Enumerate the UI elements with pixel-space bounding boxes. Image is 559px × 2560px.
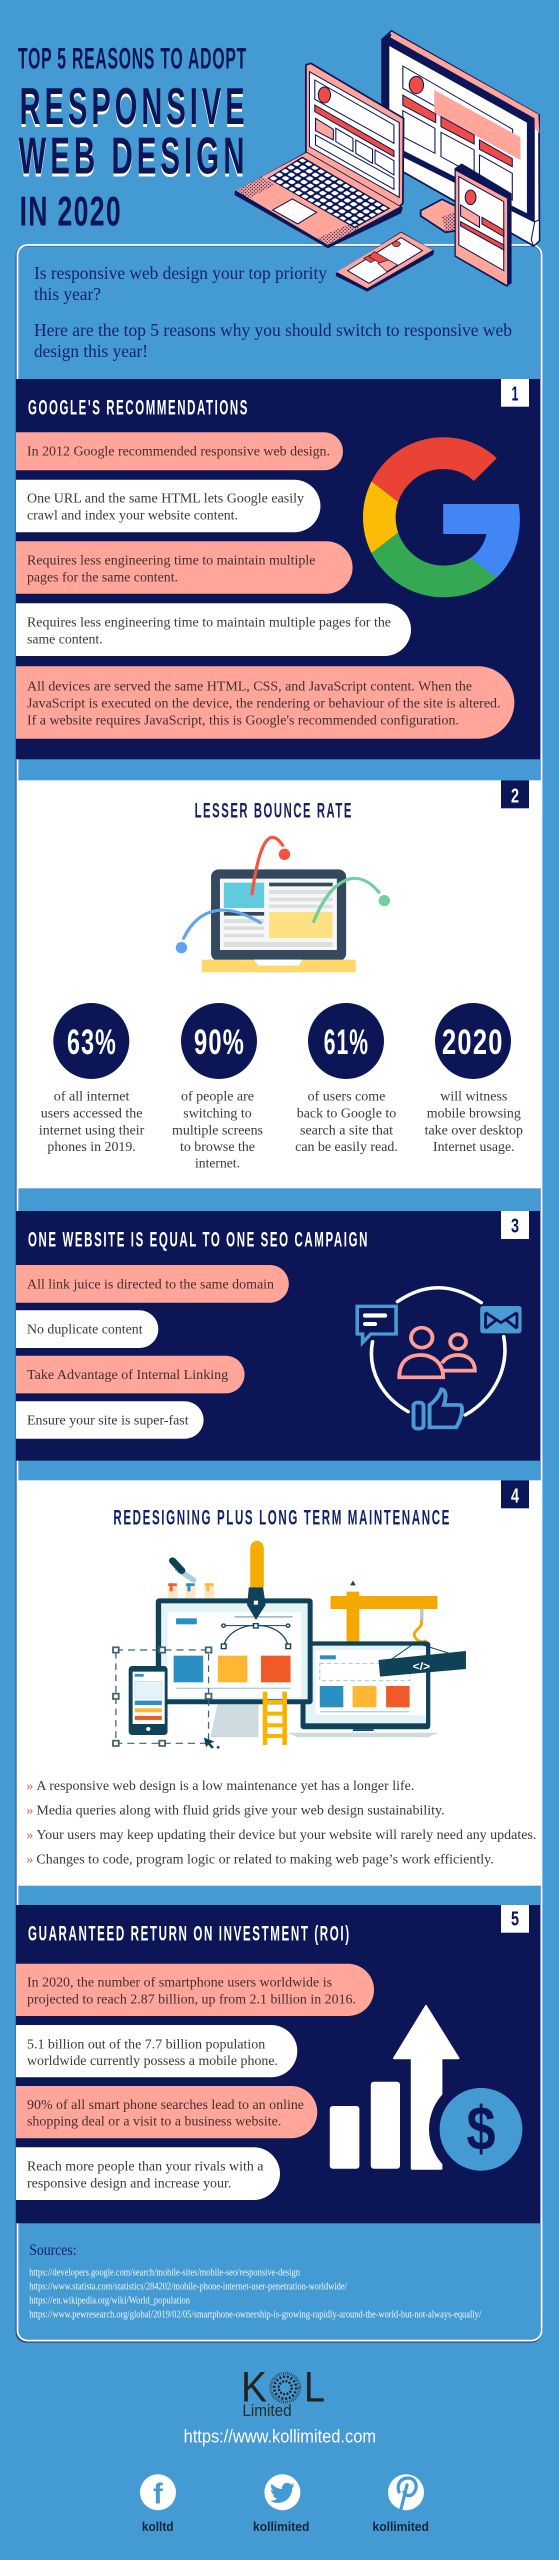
icon: code sign: </> (413, 1660, 430, 1673)
bullet 3: » (26, 1828, 33, 1843)
icon: chat bubble (357, 1306, 396, 1343)
stat 61%: back to Google to (297, 1107, 396, 1122)
bullet 1: A responsive web design is a low maintenance yet has a longer life. (36, 1779, 414, 1794)
bullet 2: Media queries along with fluid grids give your web design sustainability. (36, 1804, 445, 1819)
logo: kol limited: L (304, 2364, 325, 2412)
icon: phone (129, 1666, 168, 1735)
pill 3: Requires less engineering time to maintain multiple (27, 553, 316, 568)
intro text: design this year! (34, 341, 148, 361)
green bounce (314, 878, 390, 922)
pill 2: No duplicate content (27, 1323, 143, 1338)
number badge 2 (501, 780, 529, 808)
social: facebook (140, 2474, 176, 2534)
website url: https://www.kollimited.com (184, 2427, 376, 2447)
heading: LESSER BOUNCE RATE (195, 799, 353, 822)
pill 5: If a website requires JavaScript, this is Google's recommended configuration. (27, 713, 459, 728)
pill 4: Ensure your site is super-fast (27, 1414, 189, 1429)
sources: https://www.statista.com/statistics/284202/mobile-phone-internet-user-penetration-worldwide/ (29, 2281, 347, 2292)
pill 4: Requires less engineering time to maintain multiple pages for the (27, 616, 391, 631)
pill 2: crawl and index your website content. (27, 508, 238, 523)
icon: envelope (480, 1306, 522, 1333)
pill 5: JavaScript is executed on the device, the rendering or behaviour of the site is altered. (27, 696, 500, 711)
title line: web design: WEB DESIGN (18, 127, 248, 185)
icon: google g (363, 437, 520, 597)
stat 90% (172, 1003, 263, 1172)
sources: Sources: (29, 2242, 77, 2259)
title line: web design shadow: WEB DESIGN (18, 130, 248, 188)
pill 1: In 2020, the number of smartphone users worldwide is (27, 1976, 332, 1991)
social: twitter: kollimited (253, 2519, 309, 2534)
logo: kol limited: K (241, 2364, 267, 2412)
stat 2020 (425, 1003, 523, 1155)
stat 2020: take over desktop (425, 1123, 523, 1138)
stat 90%: multiple screens (172, 1123, 263, 1138)
social: pinterest: kollimited (372, 2519, 429, 2534)
icon: desktop monitor (382, 31, 539, 246)
number badge 3 (501, 1211, 529, 1239)
pill 4 (16, 603, 411, 656)
icon: fountain pen (247, 1541, 266, 1620)
red bounce (252, 837, 290, 894)
sources: https://www.pewresearch.org/global/2019/02/05/smartphone-ownership-is-growing-rapidly-around-the-world-but-not-always-equally/ (29, 2309, 481, 2320)
stat 61%: of users come (308, 1090, 385, 1105)
sources: https://en.wikipedia.org/wiki/World_population (29, 2295, 190, 2306)
number badge 1: 1 (512, 384, 518, 406)
pill 3: 90% of all smart phone searches lead to an online (27, 2098, 304, 2113)
social: pinterest (372, 2474, 429, 2534)
stat 63%: 63% (67, 1023, 117, 1062)
panel: redesigning plus long term maintenance (18, 1480, 542, 1886)
icon: code sign (379, 1643, 466, 1677)
pill 3: pages for the same content. (27, 570, 178, 585)
pill 2: 5.1 billion out of the 7.7 billion population (27, 2037, 265, 2052)
number badge 3: 3 (511, 1215, 519, 1237)
number badge 4: 4 (511, 1485, 520, 1507)
illustration: responsive design workshop (113, 1541, 466, 1749)
heading: GOOGLE'S RECOMMENDATIONS (28, 396, 249, 419)
stat 63% (39, 1003, 145, 1155)
title (18, 42, 249, 235)
bullet 3: Your users may keep updating their device but your website will rarely need any updates. (36, 1828, 536, 1843)
icon: laptop (235, 63, 404, 248)
icon: selection frame (113, 1647, 220, 1749)
sources: https://developers.google.com/search/mobile-sites/mobile-seo/responsive-design (29, 2267, 300, 2278)
pill 1: All link juice is directed to the same domain (27, 1277, 274, 1292)
number badge 5 (501, 1905, 529, 1933)
pill 4: Reach more people than your rivals with a (27, 2160, 264, 2175)
stat 61% (295, 1003, 398, 1155)
blue bounce (176, 910, 260, 953)
pill 1 (16, 1265, 289, 1303)
pill 3 (16, 1356, 245, 1393)
icon: growth chart with dollar coin (330, 2006, 533, 2181)
stat 90%: to browse the (180, 1140, 255, 1155)
stat 2020: 2020 (442, 1023, 504, 1062)
panel: lesser bounce rate (18, 780, 542, 1188)
logo: kol limited (241, 2364, 325, 2420)
panel: google's recommendations (16, 379, 540, 759)
number badge 4 (501, 1480, 529, 1508)
title line: in 2020: IN 2020 (20, 188, 122, 235)
stat 61%: 61% (324, 1023, 369, 1062)
pill 2 (16, 1310, 158, 1348)
illustration: laptop with bouncing balls (176, 837, 390, 972)
pill 1 (16, 432, 343, 470)
intro text: Is responsive web design your top priority (34, 263, 327, 283)
bullet 4: Changes to code, program logic or related to making web page’s work efficiently. (36, 1853, 494, 1868)
pill 4: same content. (27, 632, 103, 647)
social: facebook: f (153, 2478, 163, 2510)
stat 63%: users accessed the (41, 1107, 142, 1122)
stat 2020: mobile browsing (427, 1107, 521, 1122)
stat 2020: Internet usage. (433, 1140, 515, 1155)
card outline (16, 245, 541, 2342)
intro text: this year? (34, 284, 101, 304)
pill 4 (16, 1401, 204, 1439)
icon: tablet (455, 163, 512, 287)
icon: people (399, 1328, 475, 1377)
logo: kol limited: Limited (242, 2401, 292, 2420)
number badge 5: 5 (511, 1909, 519, 1931)
icon: monitor stand (421, 199, 463, 232)
bullet 1: » (26, 1779, 33, 1794)
title line: responsive shadow: RESPONSIVE (20, 81, 249, 139)
stat 61%: search a site that (300, 1123, 393, 1138)
stat 90%: of people are (181, 1090, 254, 1105)
pill 3 (16, 541, 353, 594)
stat 63%: internet using their (39, 1123, 145, 1138)
pill 2: worldwide currently possess a mobile phone. (27, 2054, 278, 2069)
title line: top 5 reasons: TOP 5 REASONS TO ADOPT (18, 42, 247, 75)
icon: smartphone (336, 232, 434, 292)
intro text: Here are the top 5 reasons why you should switch to responsive web (34, 320, 512, 340)
icon: laptop (287, 1641, 439, 1737)
stat 61%: can be easily read. (295, 1140, 398, 1155)
icon: ladder (263, 1692, 287, 1745)
stat 63%: phones in 2019. (47, 1140, 136, 1155)
pill 3: shopping deal or a visit to a business website. (27, 2115, 281, 2130)
pill 4 (16, 2147, 280, 2200)
pill 2 (16, 2025, 297, 2077)
icon: crane (330, 1581, 437, 1642)
intro text (34, 263, 512, 361)
bullet 2: » (26, 1804, 33, 1819)
number badge 1 (501, 379, 529, 407)
social: facebook: kolltd (142, 2519, 174, 2534)
stat 63%: of all internet (54, 1090, 130, 1105)
pill 1 (16, 1964, 374, 2016)
pill 5: All devices are served the same HTML, CSS, and JavaScript content. When the (27, 680, 472, 695)
stat 90%: 90% (194, 1023, 245, 1062)
sources (29, 2242, 481, 2320)
pill 1: projected to reach 2.87 billion, up from 2.1 billion in 2016. (27, 1992, 356, 2007)
pill 4: responsive design and increase your. (27, 2176, 231, 2191)
stat 90%: switching to (183, 1107, 252, 1122)
icon: colour swatches (168, 1583, 214, 1598)
stat 2020: will witness (440, 1090, 507, 1105)
bullet 4: » (26, 1853, 33, 1868)
pill 3 (16, 2086, 317, 2138)
number badge 2: 2 (511, 785, 519, 807)
title line: responsive: RESPONSIVE (20, 78, 249, 136)
pill 3: Take Advantage of Internal Linking (27, 1368, 228, 1383)
icon: desktop monitor (156, 1598, 313, 1704)
illustration: isometric responsive devices (235, 31, 539, 292)
panel: guaranteed return on investment (16, 1905, 540, 2223)
pill 2: One URL and the same HTML lets Google easily (27, 492, 304, 507)
bullet list (26, 1779, 536, 1868)
icon: monitor stand (210, 1704, 258, 1737)
stat 90%: internet. (195, 1157, 240, 1172)
panel: one website one seo campaign (16, 1211, 540, 1461)
icon: dropper (173, 1561, 194, 1580)
icon: thumbs up (414, 1389, 462, 1429)
pill 2 (16, 480, 320, 532)
pill 1: In 2012 Google recommended responsive web design. (27, 445, 330, 460)
icon: social engagement cycle (357, 1288, 522, 1429)
icon: growth chart with dollar coin: $ (466, 2095, 496, 2164)
pill 5 (16, 666, 514, 739)
social: twitter (253, 2474, 309, 2534)
